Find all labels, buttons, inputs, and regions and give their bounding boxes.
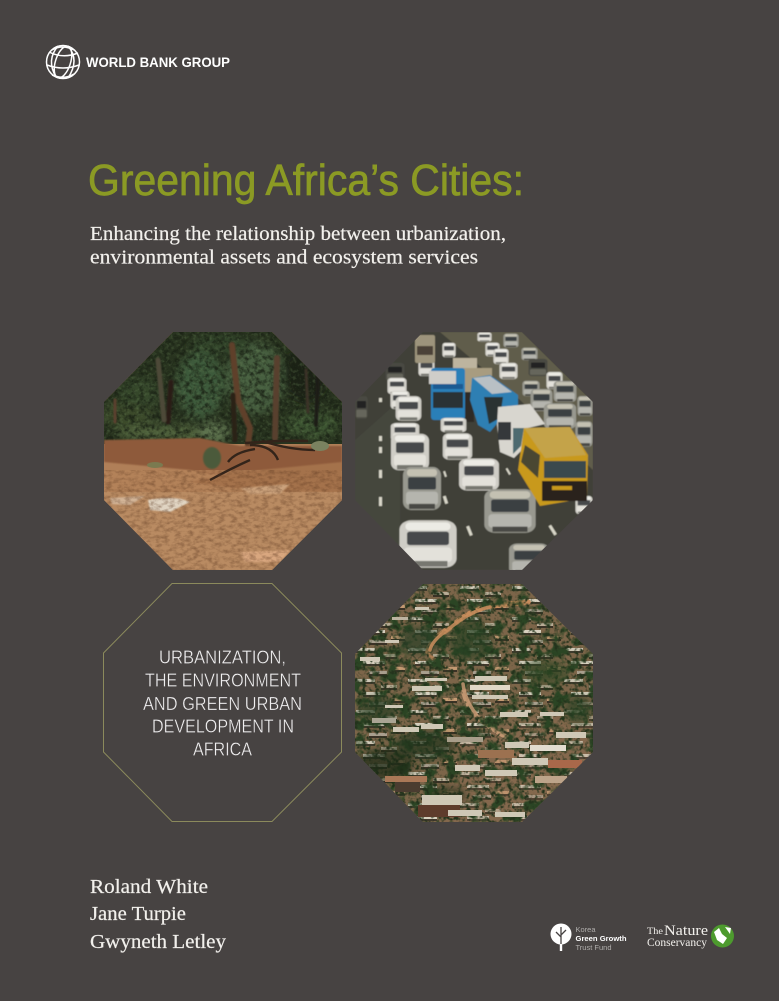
authors: Roland White (90, 876, 208, 898)
fund name: Green Growth (576, 934, 627, 943)
roots (210, 441, 315, 480)
logo: World Bank Group (46, 44, 230, 80)
logo: The Nature Conservancy (647, 923, 734, 949)
logo: Korea Green Growth Trust Fund (550, 924, 627, 952)
wordmark (647, 923, 708, 949)
panel: report series title (104, 584, 342, 822)
wordmark: The (647, 927, 663, 937)
bank (104, 438, 342, 480)
light patches (110, 484, 290, 562)
lane markings (379, 398, 557, 536)
title: Greening Africa’s Cities: (88, 156, 524, 205)
series title text: AND GREEN URBAN (143, 694, 302, 714)
subtitle (90, 223, 506, 268)
icon: leaf globe (711, 924, 734, 948)
blue bus left (429, 368, 465, 420)
authors (90, 876, 227, 953)
wordmark: Nature (664, 923, 708, 939)
dirt roads (428, 602, 528, 738)
series title text: DEVELOPMENT IN (152, 716, 294, 736)
fund name: Korea (576, 925, 596, 934)
roofs (360, 607, 586, 817)
authors: Jane Turpie (90, 903, 186, 925)
photo: eroded riverbank with trees (95, 332, 342, 570)
lower-right tile warmth (454, 704, 593, 821)
series title text: URBANIZATION, (159, 648, 286, 668)
fund name: Trust Fund (576, 943, 611, 952)
white van (497, 404, 545, 458)
wordmark: Conservancy (647, 937, 707, 949)
road highlights (430, 607, 490, 714)
icon: globe (46, 44, 80, 80)
subtitle: environmental assets and ecosystem services (90, 246, 478, 268)
series title text (143, 648, 302, 760)
fund name (576, 925, 627, 952)
photo: traffic jam (355, 332, 593, 575)
cars back row (477, 332, 492, 342)
series title text: THE ENVIRONMENT (145, 670, 301, 690)
photo: hillside settlement (355, 584, 593, 822)
blue bus right (470, 375, 518, 432)
series title text: AFRICA (193, 740, 252, 760)
subtitle: Enhancing the relationship between urbanization, (90, 223, 506, 245)
yellow bus (518, 427, 588, 506)
octagon outline (104, 584, 342, 822)
wordmark: WORLD BANK GROUP (86, 55, 230, 70)
icon: tree (550, 924, 572, 951)
tree canopy (355, 584, 593, 822)
authors: Gwyneth Letley (90, 931, 227, 953)
bus: tan at rear (415, 335, 435, 363)
